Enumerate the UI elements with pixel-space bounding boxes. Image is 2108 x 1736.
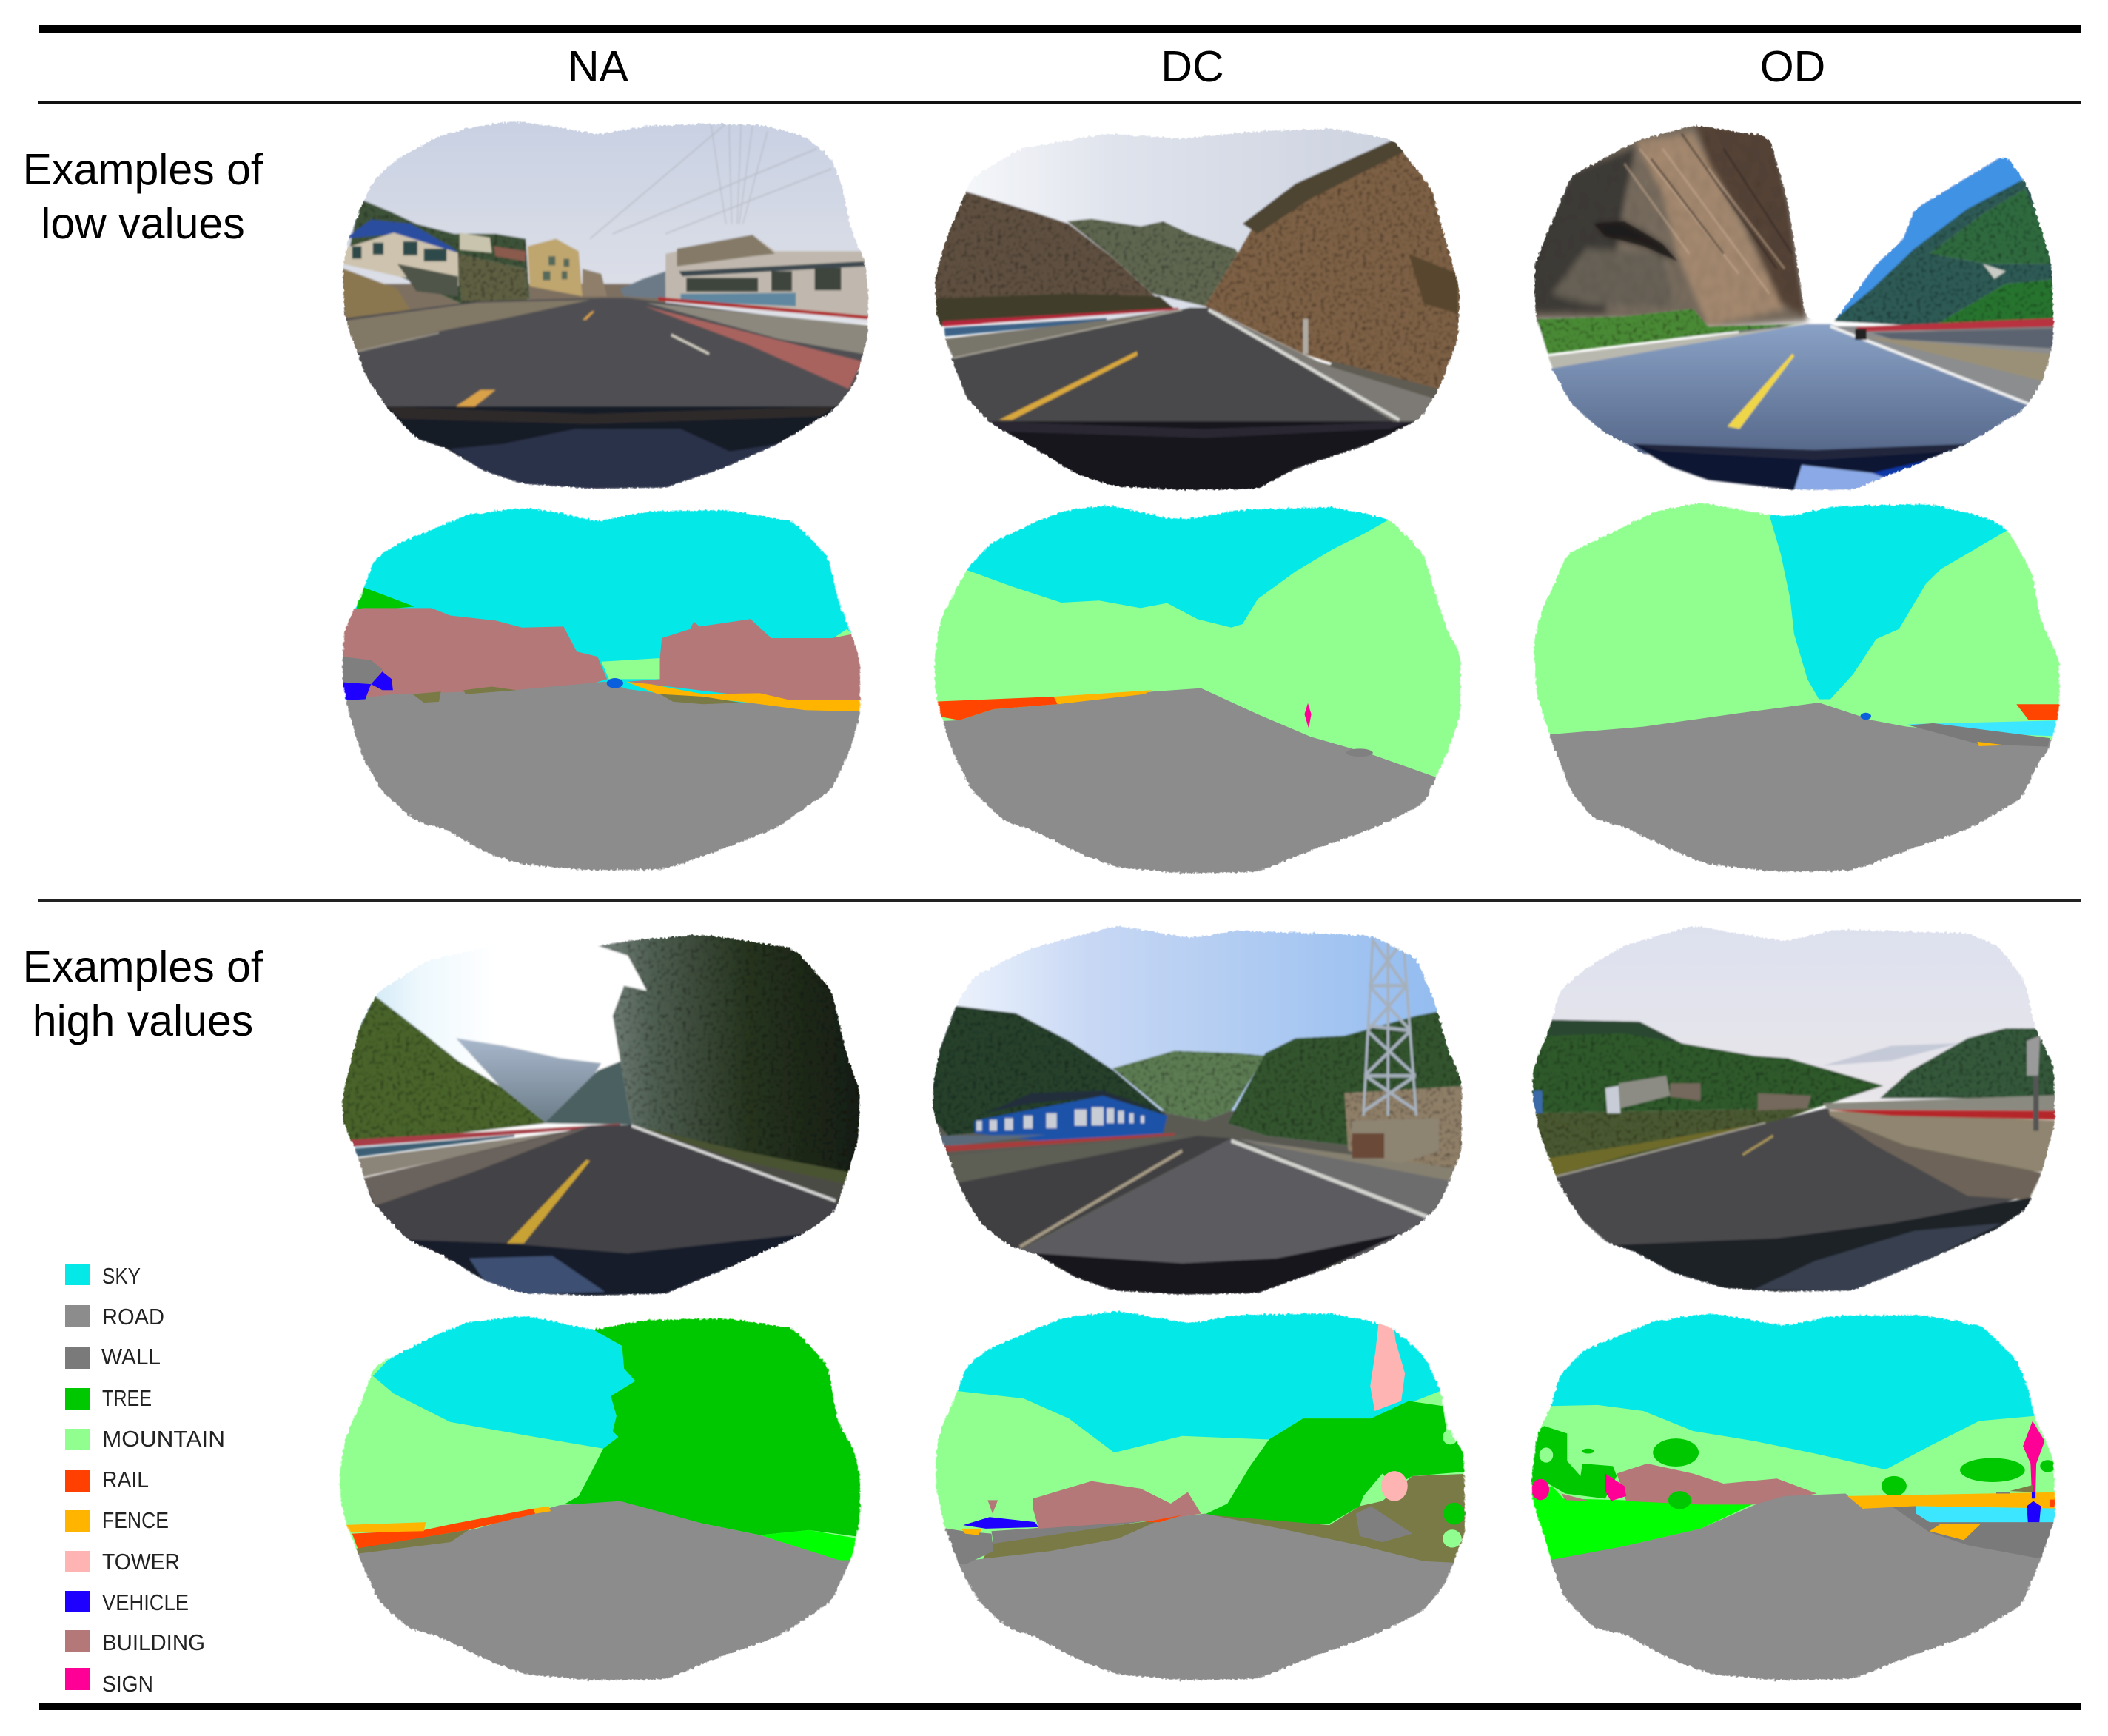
legend item: wall xyxy=(65,1344,161,1370)
panel: NA high forest road photo xyxy=(333,925,877,1296)
table rule: between rows xyxy=(38,899,2081,902)
column header: DC: DC xyxy=(1161,42,1224,91)
panel: OD low segmentation map xyxy=(1517,494,2070,879)
panel: DC low road photo xyxy=(925,124,1469,491)
table rule: under header xyxy=(38,101,2081,104)
legend item: wall: WALL xyxy=(101,1344,161,1370)
legend item: rail xyxy=(65,1467,149,1492)
legend item: vehicle: VEHICLE xyxy=(102,1589,189,1615)
panel: NA low segmentation map xyxy=(333,499,877,879)
legend item: sign xyxy=(65,1668,153,1697)
row heading: examples of high values: high values xyxy=(33,996,253,1045)
table rule: bottom xyxy=(39,1703,2081,1710)
panel: OD low cliff road photo xyxy=(1517,114,2067,490)
legend item: mountain: MOUNTAIN xyxy=(102,1426,225,1452)
legend item: tree xyxy=(65,1385,152,1411)
row heading: examples of low values: Examples of xyxy=(23,145,264,194)
panel: OD high segmentation map xyxy=(1517,1306,2067,1686)
row heading: examples of high values: Examples of xyxy=(23,942,264,991)
column header: OD: OD xyxy=(1760,42,1825,91)
panel: NA low street photo xyxy=(333,114,877,489)
panel: DC high tower road photo xyxy=(925,921,1469,1295)
legend item: tower: TOWER xyxy=(102,1549,180,1575)
panel: NA high segmentation map xyxy=(329,1306,873,1686)
legend xyxy=(65,1263,225,1697)
legend item: sky xyxy=(65,1263,141,1289)
legend item: sign: SIGN xyxy=(102,1671,153,1697)
legend item: road xyxy=(65,1304,164,1330)
legend item: building: BUILDING xyxy=(102,1629,205,1655)
panel: OD high valley road photo xyxy=(1517,921,2067,1292)
table rule: top xyxy=(39,25,2081,33)
legend item: fence: FENCE xyxy=(102,1507,169,1533)
legend item: fence xyxy=(65,1507,169,1533)
legend item: tower xyxy=(65,1549,180,1575)
row heading: examples of low values: low values xyxy=(41,199,245,248)
legend item: vehicle xyxy=(65,1589,189,1615)
panel: DC low segmentation map xyxy=(925,499,1469,879)
legend item: tree: TREE xyxy=(102,1385,152,1411)
legend item: sky: SKY xyxy=(102,1263,141,1289)
panel: DC high segmentation map xyxy=(925,1306,1473,1686)
legend item: rail: RAIL xyxy=(102,1467,149,1492)
legend item: road: ROAD xyxy=(102,1304,164,1330)
column header: NA: NA xyxy=(568,42,629,91)
